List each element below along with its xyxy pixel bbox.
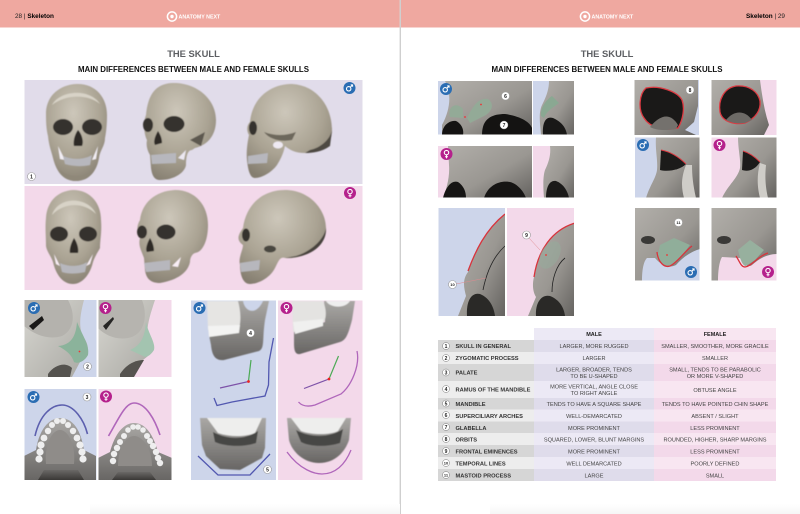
logo right: [580, 12, 634, 21]
subtitle left: MAIN DIFFERENCES BETWEEN MALE AND FEMALE SKULLS: [78, 65, 309, 74]
row 8: [438, 433, 776, 445]
row 11: SMALL: [706, 474, 724, 480]
row 10: WELL DEMARCATED: [566, 462, 622, 468]
angle lines female: [304, 356, 338, 388]
row 2: LARGER: [582, 356, 606, 362]
page number right: Skeleton | 29: [746, 13, 785, 20]
skull female three-quarter: [137, 190, 208, 283]
number 9: 9: [525, 233, 528, 239]
icon: female symbol: [344, 187, 356, 199]
row 2: ZYGOMATIC PROCESS: [456, 356, 519, 362]
row 4: 4: [445, 387, 448, 393]
logo left: ANATOMY NEXT: [178, 14, 221, 20]
panel: palate male: [24, 389, 96, 480]
row 7: GLABELLA: [456, 426, 486, 432]
skull male three-quarter: [143, 83, 216, 180]
row 8: SQUARED, LOWER, BLUNT MARGINS: [544, 438, 644, 444]
row 5: 5: [445, 401, 448, 407]
row 10: POORLY DEFINED: [691, 462, 739, 468]
icon: female symbol: [100, 302, 112, 314]
row 5: MANDIBLE: [456, 402, 486, 408]
icon: male symbol: [440, 83, 452, 95]
panel: brow male front: [438, 81, 532, 134]
row 6: [438, 410, 776, 422]
bottom page shadows: [90, 504, 800, 514]
number 4: [246, 329, 254, 337]
subtitle right: MAIN DIFFERENCES BETWEEN MALE AND FEMALE SKULLS: [492, 65, 722, 74]
panel: mandible male: [191, 300, 276, 480]
row 2: SMALLER: [702, 356, 728, 362]
logo right: ANATOMY NEXT: [592, 14, 634, 20]
panel: mastoid male: [635, 208, 700, 280]
panel: female skulls: [24, 186, 362, 290]
row 3: SMALL, TENDS TO BE PARABOLIC: [669, 368, 761, 374]
mandible side male: [207, 301, 269, 360]
number 7: 7: [503, 123, 506, 129]
row 11: MASTOID PROCESS: [456, 474, 511, 480]
panel: male skulls: [24, 80, 362, 184]
table header: FEMALE: [704, 332, 727, 338]
icon: female symbol: [440, 148, 452, 160]
skull female side: [238, 190, 326, 284]
row 11: LARGE: [585, 474, 604, 480]
skull female front: [46, 190, 101, 284]
number 1: 1: [30, 174, 33, 180]
row 6: ABSENT / SLIGHT: [691, 414, 739, 420]
panel: profile orbit male: [635, 138, 700, 198]
number 10: 10: [450, 282, 455, 287]
angle lines male: [220, 360, 251, 388]
row 4: [438, 381, 776, 398]
panel: mandible female: [278, 300, 362, 480]
row 1: SMALLER, SMOOTHER, MORE GRACILE: [661, 344, 769, 350]
panel: brow female side: [533, 146, 574, 198]
header: right page: [401, 0, 800, 28]
row 7: MORE PROMINENT: [568, 426, 621, 432]
row 9: LESS PROMINENT: [690, 450, 740, 456]
row 3: OR MORE V-SHAPED: [687, 374, 743, 380]
icon: female symbol: [762, 266, 774, 278]
row 6: 6: [445, 413, 448, 419]
row 3: 3: [445, 370, 448, 376]
header: left page: [0, 0, 400, 28]
row 9: MORE PROMINENT: [568, 450, 621, 456]
row 11: [438, 469, 776, 481]
row 8: ROUNDED, HIGHER, SHARP MARGINS: [663, 438, 767, 444]
row 3: [438, 364, 776, 381]
number 2: 2: [86, 364, 89, 370]
logo left: [167, 12, 221, 21]
panel: temporal lines male: [438, 208, 505, 316]
row 1: LARGER, MORE RUGGED: [560, 344, 628, 350]
row 3: TO BE U-SHAPED: [570, 374, 618, 380]
row 3: PALATE: [456, 370, 478, 376]
row 5: TENDS TO HAVE A SQUARE SHAPE: [547, 402, 642, 408]
number 1: [28, 172, 36, 180]
number 3: 3: [86, 395, 89, 401]
panel: frontal eminences female: [507, 208, 574, 316]
row 9: FRONTAL EMINENCES: [456, 450, 518, 456]
row 4: OBTUSE ANGLE: [693, 388, 737, 394]
panel: brow female front: [438, 146, 532, 198]
icon: male symbol: [344, 82, 356, 94]
row 8: ORBITS: [456, 438, 477, 444]
table header: [534, 328, 776, 340]
table: differences: [438, 328, 776, 481]
panel: brow male side: [533, 81, 574, 134]
number 8: 8: [689, 88, 692, 94]
ramus outline male: [214, 338, 274, 406]
panel: palate female: [98, 389, 172, 480]
row 11: 11: [444, 472, 449, 478]
page gutter: [400, 0, 401, 514]
row 5: [438, 398, 776, 410]
mandible side female: [292, 301, 355, 354]
panel: zygomatic female: [98, 300, 172, 377]
table header: MALE: [586, 332, 602, 338]
number 5: [264, 466, 272, 474]
row 6: SUPERCILIARY ARCHES: [456, 414, 523, 420]
row 5: TENDS TO HAVE POINTED CHIN SHAPE: [662, 402, 769, 408]
icon: male symbol: [28, 391, 40, 403]
panel: zygomatic male: [24, 300, 96, 377]
number 5: 5: [266, 467, 269, 473]
row 10: [438, 457, 776, 469]
row 4: MORE VERTICAL, ANGLE CLOSE: [550, 384, 638, 390]
row 1: SKULL IN GENERAL: [456, 344, 512, 350]
row 1: 1: [445, 344, 448, 350]
row 9: [438, 445, 776, 457]
row 7: 7: [445, 425, 448, 431]
row 10: 10: [444, 460, 449, 466]
jaw outline female: [287, 450, 351, 474]
icon: male symbol: [637, 139, 649, 151]
panel: mastoid female: [712, 208, 776, 280]
ramus outline female: [298, 351, 358, 406]
title right: THE SKULL: [581, 48, 634, 59]
row 9: 9: [445, 449, 448, 455]
icon: male symbol: [194, 302, 206, 314]
row 10: TEMPORAL LINES: [456, 462, 506, 468]
jaw outline male: [198, 454, 270, 475]
row 4: RAMUS OF THE MANDIBLE: [456, 388, 531, 394]
icon: female symbol: [100, 390, 112, 402]
row 6: WELL-DEMARCATED: [566, 414, 622, 420]
row 2: [438, 352, 776, 364]
skull male side: [247, 84, 332, 178]
icon: male symbol: [685, 266, 697, 278]
skull male front: [46, 84, 107, 181]
icon: male symbol: [28, 302, 40, 314]
row 3: LARGER, BROADER, TENDS: [556, 368, 632, 374]
mandible front male: [200, 418, 266, 470]
number 4: 4: [249, 331, 252, 337]
row 7: [438, 422, 776, 433]
row 2: 2: [445, 356, 448, 362]
panel: orbit female: [712, 80, 776, 135]
panel: profile orbit female: [712, 138, 776, 198]
row 8: 8: [445, 437, 448, 443]
row 1: [438, 340, 776, 352]
panel: orbit male: [634, 80, 699, 135]
number 6: 6: [504, 94, 507, 100]
row 4: TO RIGHT ANGLE: [571, 391, 618, 397]
number 11: 11: [676, 220, 681, 225]
row 7: LESS PROMINENT: [690, 426, 740, 432]
title left: THE SKULL: [167, 48, 220, 59]
mandible front female: [287, 418, 351, 463]
page number left: 28 | Skeleton: [15, 13, 54, 20]
icon: female symbol: [280, 302, 292, 314]
icon: female symbol: [714, 139, 726, 151]
